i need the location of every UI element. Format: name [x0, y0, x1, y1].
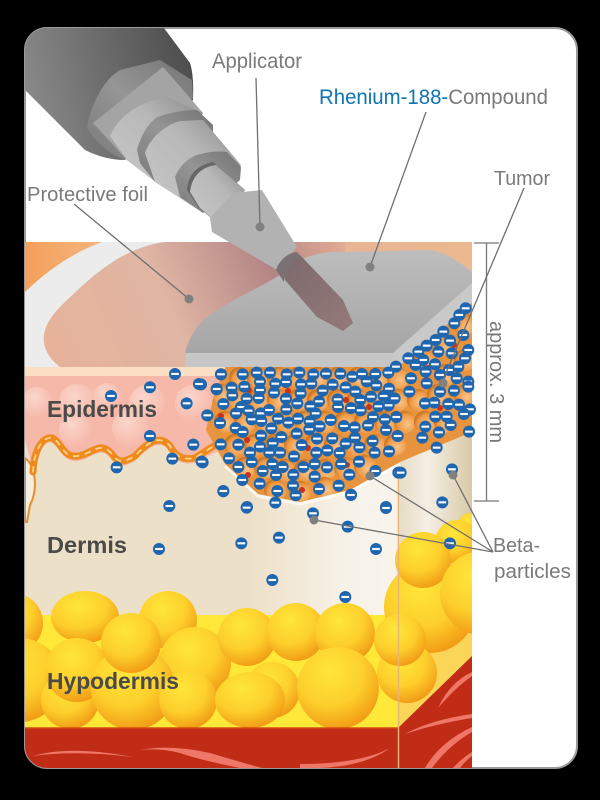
- cone section B: [145, 120, 241, 213]
- tumor: [200, 295, 476, 505]
- beta particles: [105, 302, 476, 603]
- particles upper left: [105, 368, 227, 402]
- leader lines and dots: [74, 78, 524, 552]
- label: Beta-particles: [493, 534, 571, 583]
- label: Epidermis: Epidermis: [47, 396, 157, 422]
- basal layer: [33, 438, 220, 472]
- label: Beta-particles: particles: [494, 560, 571, 583]
- tumor halo: [225, 464, 400, 504]
- dermis: [25, 435, 472, 615]
- particles lower left: [111, 397, 285, 586]
- housing: [20, 20, 193, 160]
- label: Applicator: Applicator: [212, 50, 302, 73]
- rhenium compound: [185, 250, 472, 367]
- particles over right wedge: [402, 302, 474, 398]
- epidermis: [25, 367, 226, 466]
- tip: [276, 252, 353, 331]
- applicator: [20, 20, 353, 331]
- cone section A: [93, 67, 203, 183]
- label: Beta-particles: Beta-: [493, 534, 540, 557]
- skin cross-section: [25, 28, 472, 768]
- dimension bracket: approx. 3 mm: [474, 243, 507, 501]
- label: Rhenium-188-Compound: Rhenium-188-Compound: [319, 86, 548, 109]
- ring 2: [137, 110, 213, 182]
- label: Dermis: Dermis: [47, 532, 127, 558]
- label: Protective foil: Protective foil: [27, 183, 148, 206]
- neck: [187, 162, 245, 218]
- hypodermis fat: [25, 513, 472, 728]
- hair follicle: [25, 458, 35, 522]
- protective foil: [25, 242, 345, 367]
- nut: [210, 190, 297, 270]
- skin surface: [25, 242, 472, 368]
- ring 1: [87, 60, 193, 160]
- particles over tumor: [195, 361, 404, 513]
- label: Hypodermis: Hypodermis: [47, 668, 179, 694]
- ring 3: [175, 151, 241, 213]
- label: Tumor: Tumor: [494, 167, 550, 190]
- muscle: [25, 656, 472, 768]
- particles lower right: [307, 397, 476, 603]
- side edge: [398, 462, 400, 768]
- dimension bracket: approx. 3 mm: approx. 3 mm: [485, 321, 507, 443]
